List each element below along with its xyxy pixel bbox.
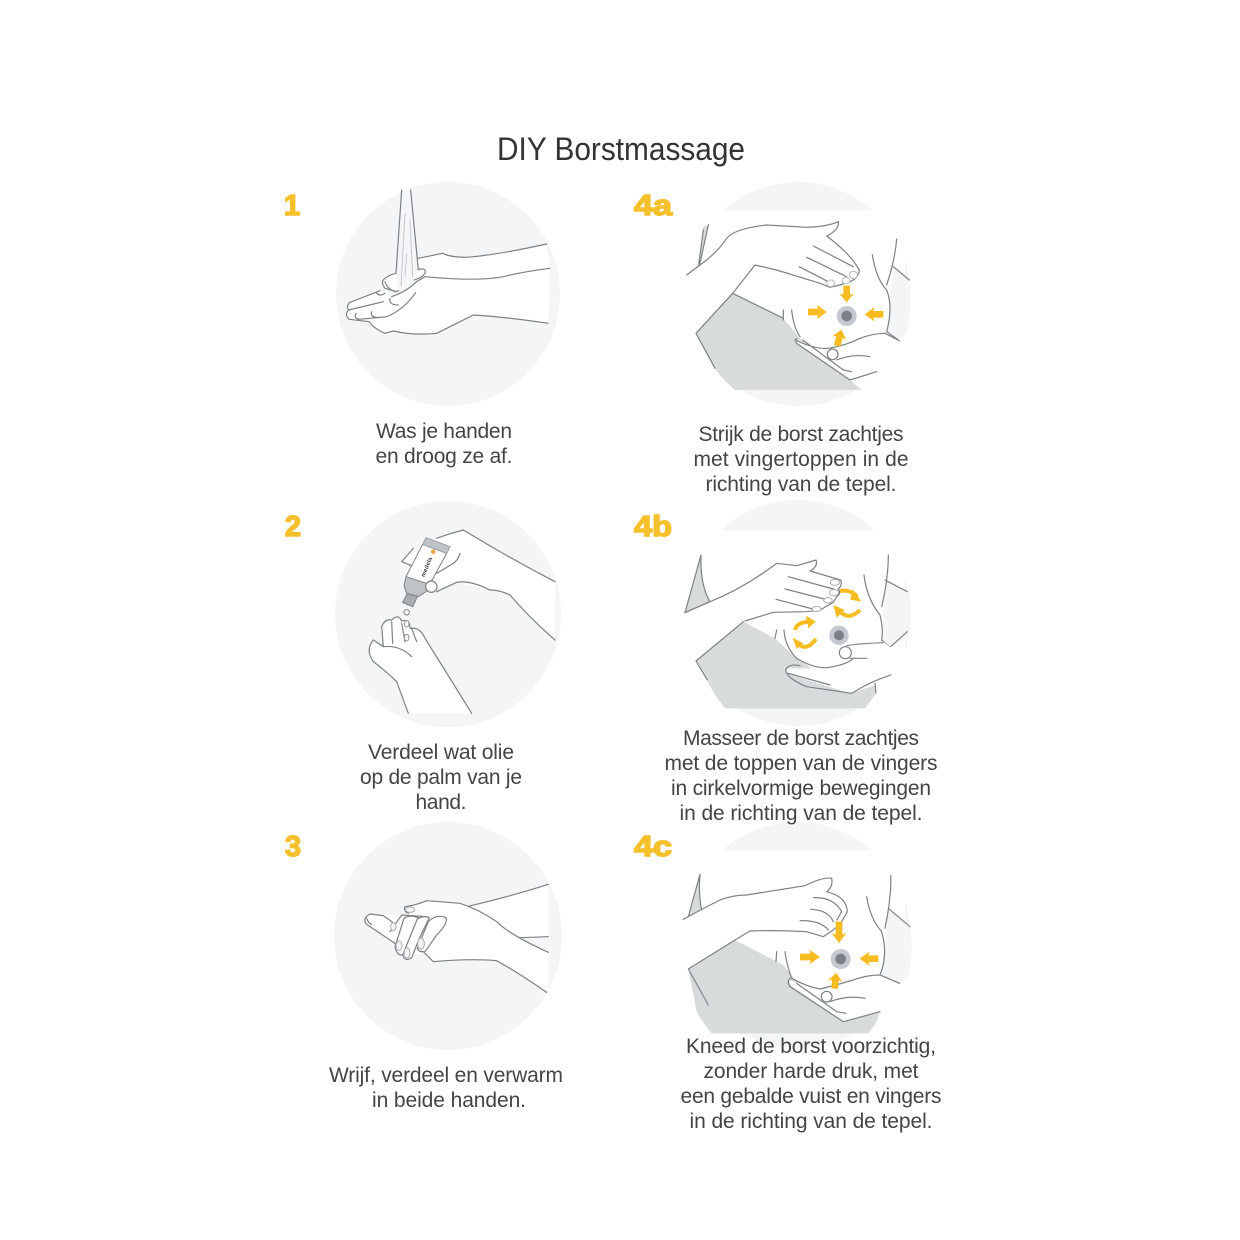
caption 2: Verdeel wat olie <box>368 741 514 764</box>
title: DIY Borstmassage <box>497 131 745 167</box>
illustration: washing hands <box>346 190 550 334</box>
circle background 4a <box>686 182 910 406</box>
caption 2 <box>360 741 522 814</box>
panel: step 1 <box>284 182 560 468</box>
white backing 4b <box>680 530 905 708</box>
caption 4a <box>694 423 908 496</box>
bottle label: medela <box>421 556 434 578</box>
white backing 4a <box>680 210 905 390</box>
illustration: stroking breast <box>687 222 911 390</box>
caption 4a: richting van de tepel. <box>706 473 896 496</box>
caption 4b: met de toppen van de vingers <box>664 752 938 775</box>
panel: step 4b <box>634 500 938 825</box>
step number 2: 2 <box>285 511 301 543</box>
circle background 3 <box>334 822 562 1050</box>
caption 4c: in de richting van de tepel. <box>690 1110 932 1133</box>
arrows 4c <box>800 922 878 989</box>
caption 4b <box>664 727 938 825</box>
caption 1: en droog ze af. <box>376 445 512 468</box>
caption 1: Was je handen <box>376 420 512 443</box>
circle background 1 <box>336 182 560 406</box>
caption 1 <box>376 420 512 468</box>
panel: step 4c <box>634 822 942 1133</box>
illustration: circular massage <box>685 555 911 708</box>
circle background 2 <box>335 501 561 727</box>
caption 4c: Kneed de borst voorzichtig, <box>686 1035 936 1058</box>
water stream <box>396 190 418 291</box>
circle background 4c <box>684 822 910 1048</box>
caption 2: op de palm van je <box>360 766 522 789</box>
step number 4b: 4b <box>634 511 672 543</box>
step number 4a: 4a <box>634 190 673 222</box>
step number 3: 3 <box>285 831 301 863</box>
caption 4a: Strijk de borst zachtjes <box>698 423 904 446</box>
caption 2: hand. <box>416 791 466 814</box>
white backing 4c <box>680 850 905 1033</box>
arrows 4a <box>808 286 883 348</box>
circular arrows 4b <box>793 590 861 649</box>
step number 1: 1 <box>284 190 300 222</box>
step number 4c: 4c <box>634 831 672 863</box>
panel: step 3 <box>285 822 563 1112</box>
caption 3: Wrijf, verdeel en verwarm <box>329 1064 563 1087</box>
nipple 4c <box>831 949 851 969</box>
caption 4c <box>680 1035 942 1133</box>
caption 4b: in cirkelvormige bewegingen <box>671 777 931 800</box>
illustration: kneading <box>683 874 912 1033</box>
nipple 4a <box>837 306 857 326</box>
panel: step 2 <box>285 501 561 814</box>
caption 4b: in de richting van de tepel. <box>680 802 922 825</box>
caption 4b: Masseer de borst zachtjes <box>683 727 919 750</box>
oil drops <box>404 610 409 615</box>
caption 3 <box>329 1064 563 1112</box>
caption 4a: met vingertoppen in de <box>694 448 908 471</box>
circle background 4b <box>685 500 911 726</box>
caption 4c: zonder harde druk, met <box>704 1060 919 1083</box>
panel: step 4a <box>634 182 911 496</box>
caption 3: in beide handen. <box>372 1089 526 1112</box>
nipple 4b <box>829 626 849 645</box>
illustration: oil bottle and hand <box>369 530 555 713</box>
illustration: rubbing hands <box>364 884 548 992</box>
caption 4c: een gebalde vuist en vingers <box>680 1085 942 1108</box>
